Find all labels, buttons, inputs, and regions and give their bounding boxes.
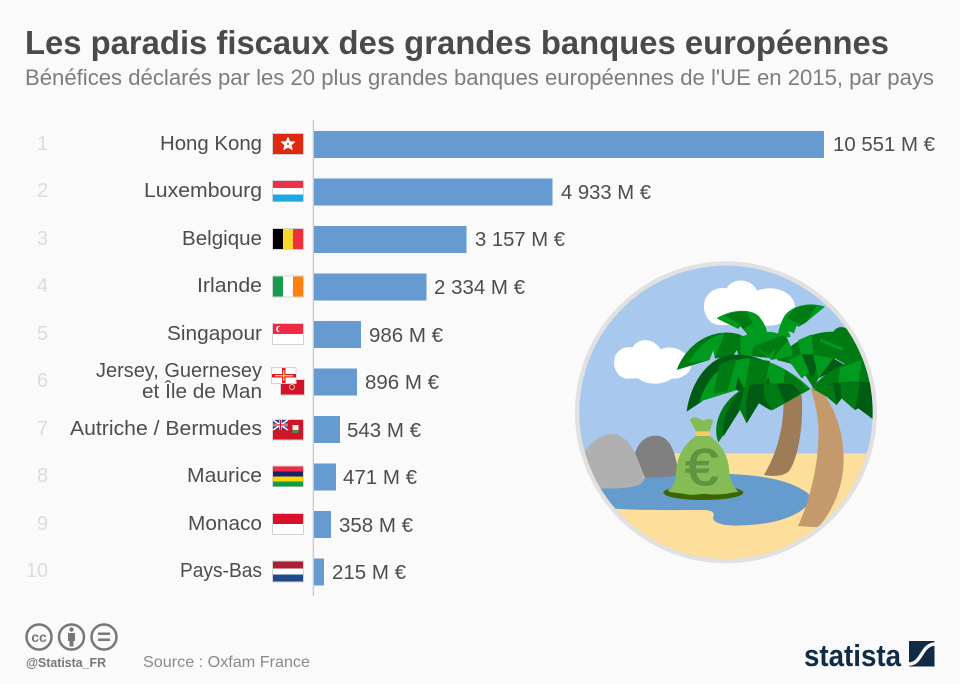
frond: right lower [812,359,873,419]
statista logo: statista [804,638,902,673]
flag: Belgique [272,228,304,250]
row 2: Luxembourg [37,178,652,206]
row 3: Belgique [37,226,566,253]
row 10: Pays-Bas [26,558,407,586]
row 8: Maurice: 8 [37,465,48,487]
cloud: upper right [704,280,795,326]
row 6: Jersey, Guernesey et Île de Man: 6 [37,370,48,392]
footer: source: Source : Oxfam France [143,654,310,671]
row 2: Luxembourg: Luxembourg [144,179,262,202]
row 9: Monaco: 9 [37,513,48,535]
frond: middle [687,355,811,412]
row 5: Singapour [37,321,444,348]
row 10: Pays-Bas: Pays-Bas [180,559,262,582]
footer: licence icons: cc [31,629,47,645]
row 3: Belgique: Belgique [182,227,262,250]
row 4: Irlande [37,274,526,300]
flag: Hong Kong [272,134,304,154]
row 9: Monaco: Monaco [188,512,262,535]
rock: dark [635,436,678,478]
bag tie [695,431,710,436]
cloud: left [614,340,691,384]
flag: Guernsey [272,368,296,384]
row 7: Autriche / Bermudes: 7 [37,418,48,440]
flag: Singapour [272,324,304,344]
money bag [663,417,743,500]
water [590,474,811,526]
row 1: Hong Kong: 10 551 M € [833,133,936,156]
flag: Luxembourg [272,180,304,202]
flag: Irlande [272,276,304,297]
rock: light [580,434,644,489]
flag: Monaco [272,514,304,534]
row 6: Jersey, Guernesey et Île de Man: et Île de Man [142,380,262,403]
euro symbol: € [685,438,718,496]
row 10: Pays-Bas: 215 M € [332,561,407,584]
flag: Isle of Man [280,380,304,395]
row 6: Jersey, Guernesey et Île de Man: 896 M € [365,371,440,394]
beach [585,453,867,559]
footer: handle: @Statista_FR [26,655,107,670]
row 4: Irlande: 4 [37,275,48,297]
row 7: Autriche / Bermudes [37,416,422,443]
row 8: Maurice: 471 M € [343,466,418,489]
row 5: Singapour: 986 M € [369,324,444,347]
row 2: Luxembourg: 2 [37,180,48,202]
axis line [313,120,314,596]
flag: Pays-Bas [272,561,304,582]
frond: upper left [677,332,793,370]
illustration: tropical island with money bag [570,260,883,567]
row 6: Jersey, Guernesey et Île de Man [37,359,440,403]
row 1: Hong Kong [37,131,936,158]
flag: Bermudes [272,420,304,440]
trunk: front palm [798,389,844,527]
row 4: Irlande: Irlande [197,274,262,297]
row 2: Luxembourg: 4 933 M € [561,181,652,204]
row 7: Autriche / Bermudes: 543 M € [347,419,422,442]
row 3: Belgique: 3 [37,228,48,250]
row 1: Hong Kong: 1 [37,133,48,155]
row 8: Maurice: Maurice [187,464,262,487]
row 3: Belgique: 3 157 M € [475,228,566,251]
row 4: Irlande: 2 334 M € [434,276,526,299]
row 5: Singapour: 5 [37,323,48,345]
frond: right upper [777,327,867,389]
row 9: Monaco: 358 M € [339,514,414,537]
title: Les paradis fiscaux des grandes banques européennes [25,25,889,62]
row 8: Maurice [37,464,418,490]
row 1: Hong Kong: Hong Kong [160,132,262,155]
footer: licence icons [26,624,116,650]
row 6: Jersey, Guernesey et Île de Man: Jersey, Guernesey [96,359,263,382]
frond: top left small [717,311,767,337]
row 7: Autriche / Bermudes: Autriche / Bermudes [70,417,262,440]
subtitle: Bénéfices déclarés par les 20 plus grandes banques européennes de l'UE en 2015, par pays [25,65,934,90]
flag: Maurice [272,466,304,486]
row 10: Pays-Bas: 10 [26,560,48,582]
palm fronds [677,304,883,442]
frond: lower [716,383,810,442]
frond: top right small [778,304,825,340]
row 9: Monaco [37,511,414,538]
trunk: back palm [764,393,802,476]
row 5: Singapour: Singapour [167,322,262,345]
